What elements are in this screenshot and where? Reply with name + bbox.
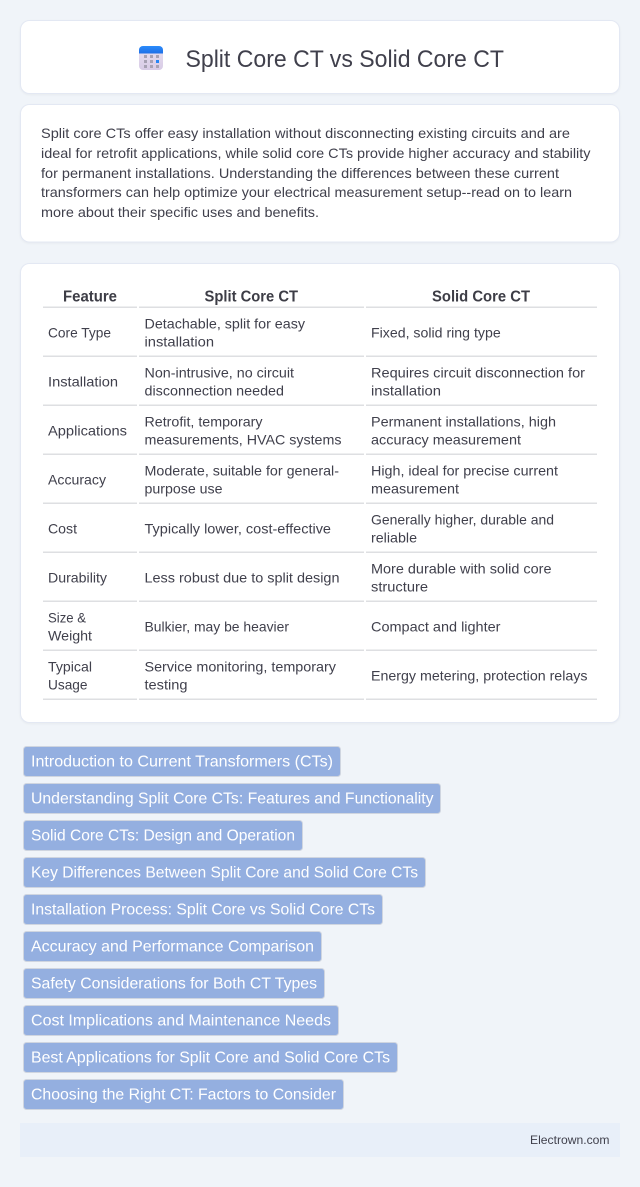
table row: Installation (43, 364, 597, 406)
table row: Accuracy: Accuracy (48, 472, 106, 488)
link pill: installation: Installation Process: Split Core vs Solid Core CTs (31, 902, 375, 918)
table row: Cost: Typically lower, cost-effective (144, 520, 331, 536)
link pill: installation (24, 894, 382, 924)
link pill: key differences: Key Differences Between Split Core and Solid Core CTs (31, 864, 418, 882)
text block: introduction paragraph: transformers can help optimize your electrical measurement setup--read on to learn (41, 184, 572, 200)
icon: calendar grid (139, 46, 163, 70)
table row: Accuracy: purpose use (144, 480, 223, 496)
table row: Size and Weight (43, 610, 597, 651)
footer source text: Electrown.com (530, 1133, 610, 1147)
table row: Typical Usage: Energy metering, protection relays (371, 668, 588, 684)
table row: Durability: Less robust due to split design (144, 570, 340, 586)
table row: Accuracy (43, 462, 597, 504)
link pill: choosing (24, 1080, 344, 1110)
table row: Durability (43, 560, 597, 602)
link pill: solid core (24, 820, 302, 850)
table header row: Solid Core CT (432, 288, 530, 306)
link pill: split core: Understanding Split Core CTs: Features and Functionality (31, 790, 434, 808)
link pill: introduction (24, 746, 340, 776)
table row: Cost: Cost (48, 520, 77, 536)
text block: introduction paragraph: more about their specific uses and benefits. (41, 204, 319, 220)
link pill: safety: Safety Considerations for Both CT Types (31, 976, 317, 992)
table row: Typical Usage: Service monitoring, temporary (144, 658, 336, 674)
table row: Applications: Retrofit, temporary (144, 414, 262, 430)
table header row (43, 288, 597, 308)
table row: Applications: measurements, HVAC systems (144, 432, 342, 448)
table row: Installation: Non-intrusive, no circuit (144, 364, 294, 380)
table row: Core Type: Fixed, solid ring type (371, 324, 501, 340)
table row: Installation: disconnection needed (144, 382, 284, 398)
footer (20, 1123, 620, 1157)
table row: Size and Weight: Bulkier, may be heavier (144, 618, 289, 634)
panel: introduction (20, 104, 620, 242)
panel: header (20, 20, 620, 94)
table row: Cost (43, 512, 597, 553)
table row: Installation: installation (371, 382, 441, 398)
table row: Installation: Installation (48, 374, 118, 390)
table row: Typical Usage: Usage (48, 676, 88, 692)
link pill: choosing: Choosing the Right CT: Factors to Consider (31, 1086, 337, 1104)
table header row: Split Core CT (204, 288, 298, 306)
link pill: best applications: Best Applications for Split Core and Solid Core CTs (31, 1050, 390, 1066)
table row: Typical Usage: testing (144, 676, 188, 692)
table row: Size and Weight: Size & (48, 610, 87, 626)
panel: comparison table (20, 264, 620, 722)
list of section links (24, 746, 440, 1110)
link pill: cost (24, 1006, 338, 1036)
table row: Applications: Permanent installations, high (371, 414, 556, 430)
table row: Durability: structure (371, 578, 428, 594)
table row: Typical Usage (43, 658, 597, 700)
text block: introduction paragraph: ideal for retrofit applications, while solid core CTs provide higher accuracy and stability (41, 145, 590, 161)
table row: Applications: Applications (48, 422, 127, 438)
table row: Core Type: installation (144, 334, 214, 350)
table row: Applications: accuracy measurement (371, 432, 521, 448)
link pill: key differences (24, 858, 426, 888)
table row: Accuracy: measurement (371, 480, 459, 496)
table row: Core Type: Detachable, split for easy (144, 316, 305, 332)
table row: Size and Weight: Weight (48, 628, 92, 644)
link pill: split core (24, 784, 440, 814)
table row: Applications (43, 414, 597, 455)
table row: Durability: More durable with solid core (371, 560, 552, 576)
table row: Size and Weight: Compact and lighter (371, 618, 501, 634)
link pill: accuracy (24, 932, 322, 962)
table row: Accuracy: Moderate, suitable for general- (144, 462, 339, 478)
text block: introduction paragraph (41, 125, 590, 220)
table row: Core Type: Core Type (48, 324, 111, 340)
table row: Cost: reliable (371, 530, 417, 546)
text block: introduction paragraph: Split core CTs offer easy installation without disconnecting existing circuits and are (41, 125, 570, 141)
link pill: best applications (24, 1042, 398, 1072)
table row: Durability: Durability (48, 570, 107, 586)
table row: Installation: Requires circuit disconnection for (371, 364, 585, 380)
link pill: safety (24, 968, 324, 998)
link pill: accuracy: Accuracy and Performance Comparison (31, 938, 314, 956)
table row: Core Type (43, 316, 597, 357)
text block: introduction paragraph: for permanent installations. Understanding the differences between these current (41, 165, 559, 181)
table row: Cost: Generally higher, durable and (371, 512, 554, 528)
table row: Accuracy: High, ideal for precise current (371, 462, 558, 478)
table row: Typical Usage: Typical (48, 658, 92, 674)
link pill: cost: Cost Implications and Maintenance Needs (31, 1012, 331, 1030)
title: Split Core CT vs Solid Core CT (186, 46, 504, 73)
link pill: solid core: Solid Core CTs: Design and Operation (31, 828, 295, 844)
link pill: introduction: Introduction to Current Transformers (CTs) (31, 754, 333, 770)
table header row: Feature (63, 288, 117, 306)
